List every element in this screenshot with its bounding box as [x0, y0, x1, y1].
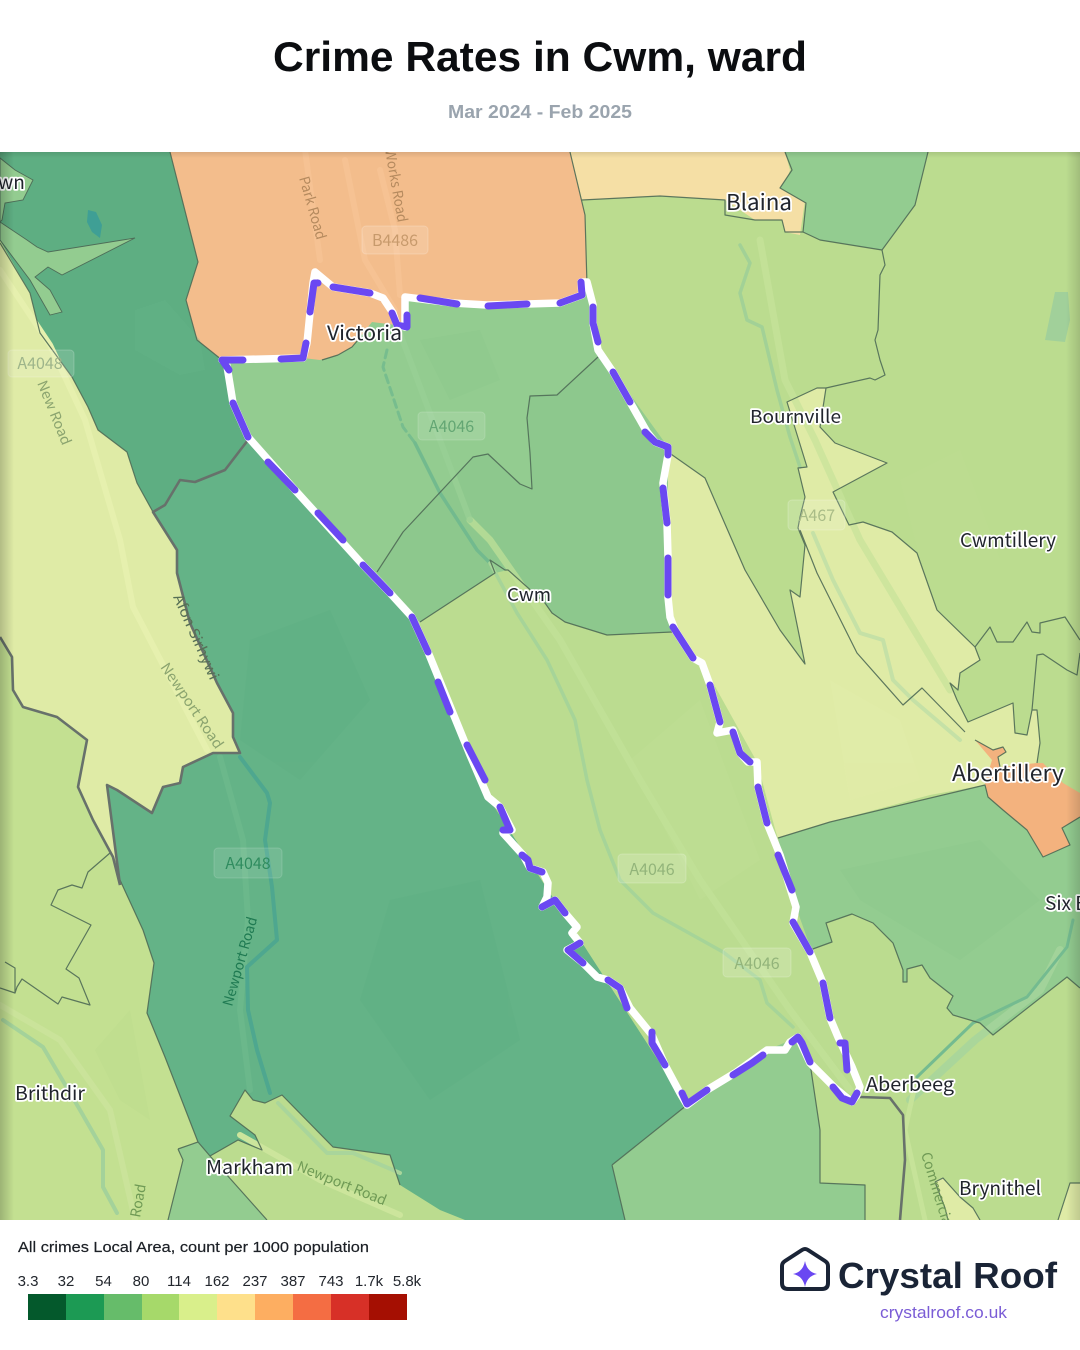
area: Brynithel pale ward [935, 1178, 1080, 1220]
area: south-west lime wards [0, 637, 198, 1220]
legend tick labels: 1.7k [355, 1273, 384, 1290]
legend tick labels: 5.8k [393, 1273, 422, 1290]
road shields [8, 226, 845, 977]
legend tick labels: 743 [318, 1273, 344, 1290]
lake: north-west reservoir [87, 210, 102, 238]
legend tick labels: 387 [280, 1273, 306, 1290]
legend [18, 1239, 422, 1320]
shield: A4048 south [214, 848, 282, 878]
road: A4048 [220, 757, 250, 1090]
river: Abertillery [813, 533, 960, 740]
river: Markham [278, 1103, 400, 1173]
place: Abertillery: Abertillery [952, 756, 1065, 788]
logo: Crystal Roof [782, 1249, 1058, 1322]
legend tick labels: 237 [242, 1273, 268, 1290]
place: Cwm: Cwm [507, 581, 551, 607]
map edge shading [0, 152, 1080, 1220]
subtitle: date range: Mar 2024 - Feb 2025 [448, 102, 632, 122]
shield: A4046 middle [618, 854, 686, 883]
land-cover texture patches [196, 336, 200, 342]
river: Ebbw Fach north [383, 350, 415, 443]
place: Victoria: Victoria [327, 317, 402, 346]
thick grey county boundary [0, 440, 905, 1220]
icon: house with star [782, 1249, 828, 1289]
place: Bournville: Bournville [750, 403, 841, 429]
area: Blaina orange-yellow ward [570, 152, 805, 235]
area: north-east medium-green ward [780, 152, 928, 250]
road label: Road, lower left: Road [125, 1182, 151, 1219]
area: southern medium-green ward [612, 1037, 865, 1220]
area: pale Abertillery ward [668, 388, 1040, 838]
road label: Afon Sirhywi: Afon Sirhywi [168, 591, 224, 683]
road: New Road and Newport Road [37, 320, 60, 360]
legend tick labels: 114 [167, 1273, 191, 1290]
road label: Works Road: Works Road [380, 147, 413, 224]
ward boundary lines [0, 152, 1080, 1220]
area: Cwm ward south lime [494, 664, 808, 1062]
road label: Newport Road Markham: Newport Road [294, 1156, 390, 1210]
logo url: crystalroof.co.uk [880, 1304, 1008, 1322]
river: Sirhowy [240, 757, 277, 1093]
roads [0, 150, 1060, 1220]
shield: B4486: B4486 [372, 227, 418, 251]
legend tick labels: 3.3 [18, 1273, 38, 1290]
road names [32, 147, 959, 1231]
area: eastern medium-green ward [778, 785, 1080, 1035]
legend colour scale [28, 1294, 407, 1320]
shield: A4048 north-west: A4048 [17, 350, 63, 374]
legend tick labels [18, 1273, 422, 1290]
legend tick labels: 32 [58, 1273, 74, 1290]
shield: A4048 south: A4048 [225, 850, 271, 874]
shield: A4046 south [723, 948, 791, 977]
area: western pale ward [0, 243, 240, 885]
river: Ebbw Fach south [490, 563, 793, 1027]
area: Cwm ward north [222, 282, 672, 635]
place: Blaina: Blaina [726, 185, 792, 217]
shield: A4048 north-west [8, 350, 74, 377]
shield: B4486 [362, 226, 428, 254]
lake: eastern pond [1045, 292, 1070, 342]
road: Commercial Road [905, 1085, 925, 1220]
legend tick labels: 80 [133, 1273, 149, 1290]
river: Blaina stream [740, 245, 800, 467]
place: Aberbeeg: Aberbeeg [866, 1070, 954, 1097]
area: north-west woodland ward [0, 152, 248, 512]
road: Markham [240, 1135, 400, 1215]
river: Six Bells [917, 920, 1073, 1077]
legend tick labels: 162 [204, 1273, 230, 1290]
ward outline: purple dashes [222, 282, 857, 1104]
place: Cwmtillery: Cwmtillery [960, 526, 1056, 553]
road: A4046 north section [452, 476, 473, 523]
ward outline: white casing [222, 272, 860, 1105]
shield: A4046 south: A4046 [734, 950, 780, 974]
shield: A4046 middle: A4046 [629, 856, 675, 880]
area: high-crime orange ward north [170, 152, 587, 360]
base area: lime wards [0, 152, 1080, 1220]
place: Brithdir: Brithdir [15, 1079, 86, 1106]
shield: A4046 north [418, 412, 485, 440]
road: east valley [792, 398, 953, 694]
road label: Newport Road south: Newport Road [218, 914, 262, 1008]
place: Markham: Markham [206, 1153, 293, 1180]
place labels [0, 168, 1080, 1201]
legend tick labels: 54 [95, 1273, 112, 1290]
area: central south woodland ward [107, 440, 687, 1220]
area: Cwm ward central [547, 605, 563, 620]
road label: Park Road: Park Road [294, 174, 331, 242]
road: south-west valley [0, 1005, 135, 1220]
road label: Commercial Road: Commercial [916, 1150, 959, 1231]
area: Abertillery orange ward [975, 740, 1080, 857]
place: Brynithel: Brynithel [959, 1174, 1041, 1201]
area: orange Victoria notch [303, 283, 397, 360]
shield: A4046 north: A4046 [429, 413, 474, 437]
logo wordmark: Crystal Roof [838, 1255, 1058, 1296]
shield: A467: A467 [799, 502, 835, 526]
road label: New Road: New Road [32, 377, 76, 448]
road: Park Road and Works Road [305, 150, 400, 310]
light top-left strip ward [0, 158, 135, 315]
road: A4046 valley [466, 518, 526, 584]
title: Crime Rates in Cwm, ward [273, 33, 807, 80]
road label: Newport Road west: Newport Road [156, 659, 228, 753]
shield: A467 [788, 500, 845, 530]
area: Markham medium-green ward [168, 1142, 267, 1220]
road: Six Bells [910, 950, 1060, 1100]
river: south-west valley [3, 1020, 117, 1213]
rivers [3, 245, 1073, 1213]
river: Ebbw Fach middle [415, 443, 490, 563]
legend title: All crimes Local Area, count per 1000 population [18, 1239, 369, 1256]
